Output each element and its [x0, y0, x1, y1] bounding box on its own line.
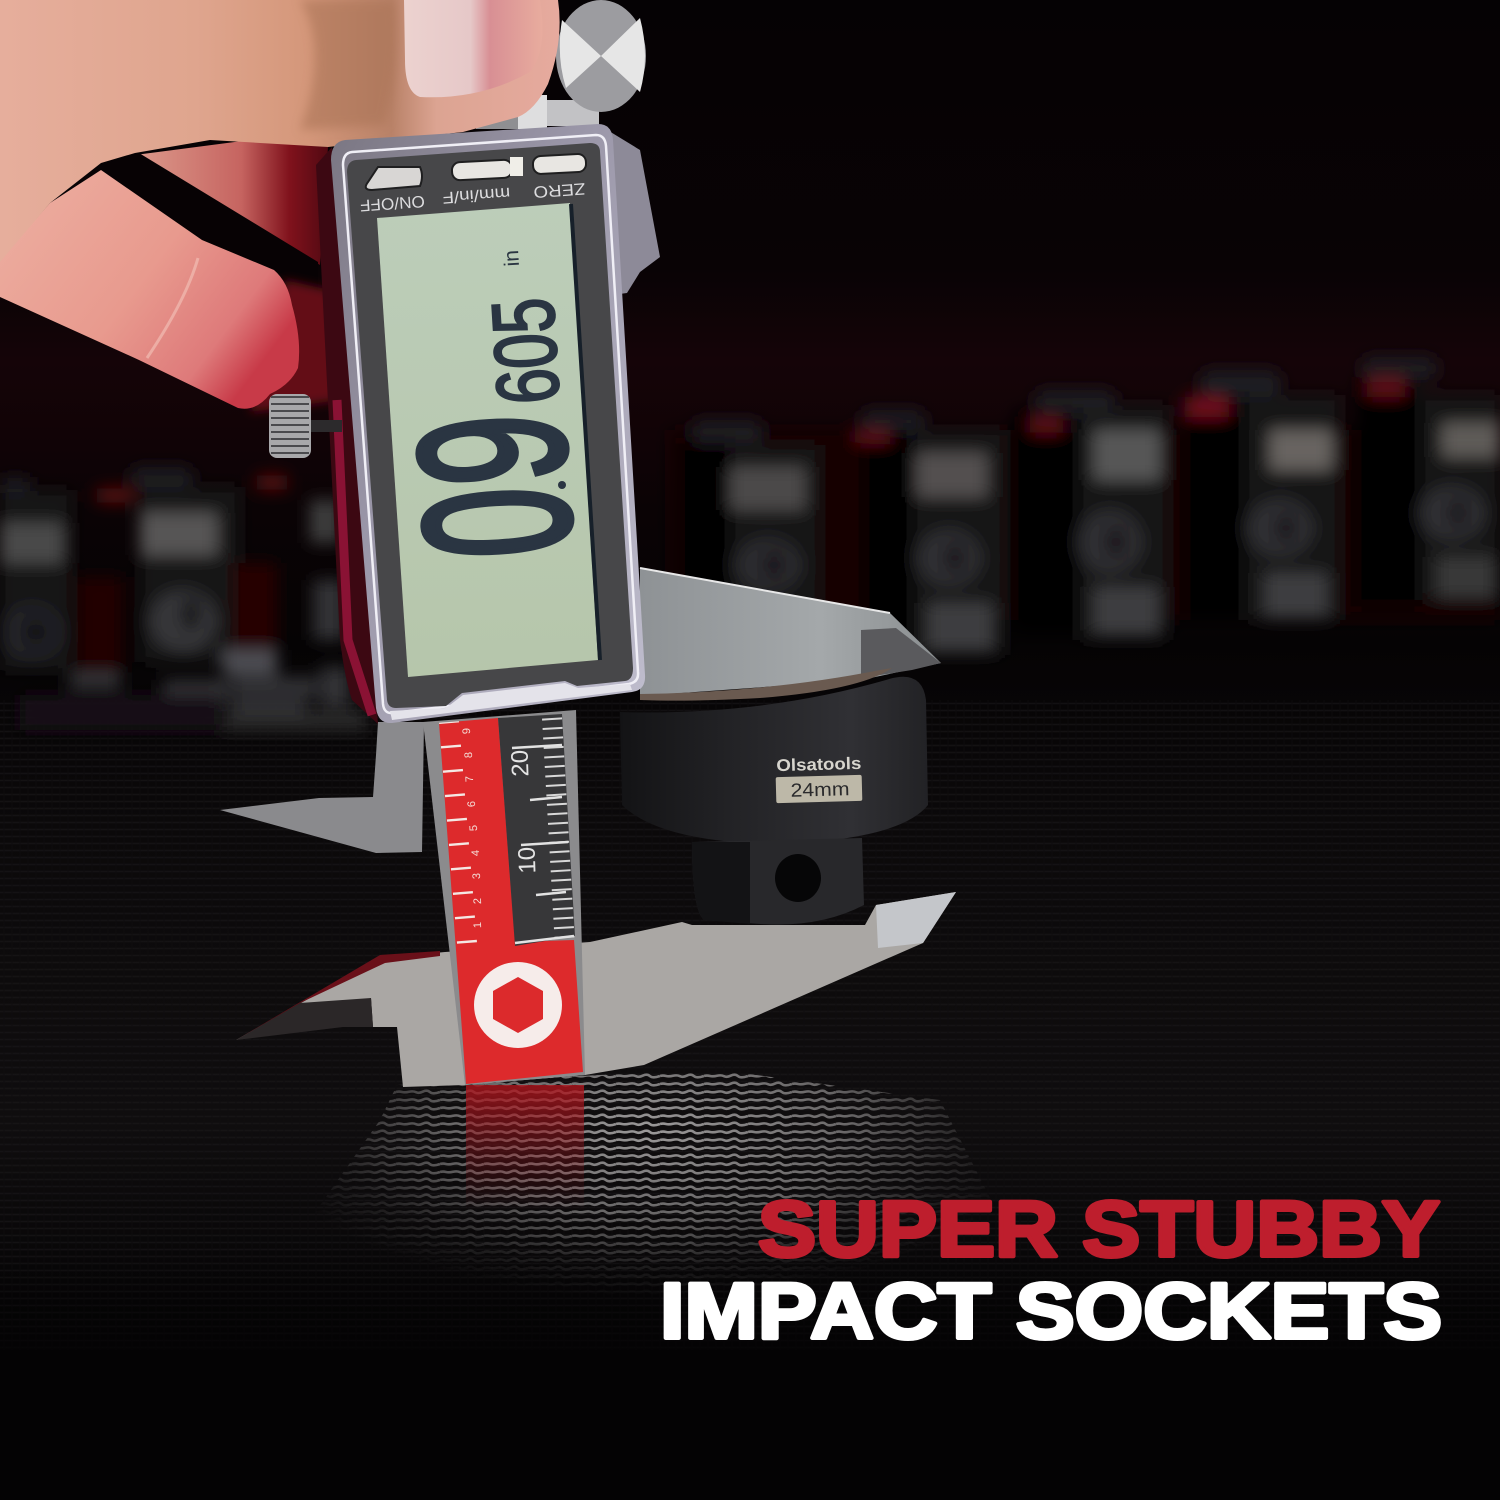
headline line 2: IMPACT SOCKETS — [660, 1266, 1442, 1355]
bright right jaw tip — [876, 892, 956, 948]
mode button — [452, 159, 512, 181]
dark scale — [498, 714, 575, 946]
zero button — [533, 154, 586, 174]
square drive — [692, 838, 864, 925]
blurred rail bars — [20, 667, 367, 730]
silver rim — [331, 124, 645, 723]
upper right jaw — [640, 568, 941, 696]
metric major ticks — [512, 745, 574, 943]
red reflection of scale on floor — [466, 1085, 584, 1210]
inch numerals: 8 — [463, 752, 475, 758]
metric numerals: 20 — [507, 749, 534, 777]
thumb nail — [404, 0, 542, 97]
retaining pin hole — [775, 854, 821, 902]
inch numerals: 3 — [471, 873, 483, 879]
LCD inner shadow line — [571, 204, 600, 660]
small reading digits: 605 — [475, 295, 578, 407]
digital display housing — [331, 124, 645, 723]
forefinger — [0, 170, 299, 409]
button labels — [359, 179, 586, 214]
centre socket — [70, 467, 240, 688]
dark faceplate — [347, 143, 633, 708]
socket one — [680, 420, 820, 630]
bottom thumbscrew — [269, 394, 342, 458]
lower lip highlight — [390, 683, 632, 720]
blurred socket row, right — [670, 357, 1500, 655]
thumb — [0, 0, 560, 262]
second finger behind — [135, 140, 328, 265]
maroon side of the display housing — [316, 147, 378, 724]
floor light reflection — [326, 1073, 985, 1284]
caliper beam — [423, 710, 585, 1085]
socket four — [1185, 370, 1340, 620]
on/off button — [366, 167, 422, 190]
size plate: 24mm — [790, 779, 850, 802]
gap between the fingers — [101, 153, 318, 290]
dark inner jaw tip — [236, 998, 373, 1040]
lower jaw — [236, 892, 956, 1087]
focused impact socket — [620, 668, 928, 925]
lower fade to black — [0, 1250, 1500, 1370]
decimal point — [558, 481, 566, 489]
fabric floor texture — [0, 700, 1500, 1350]
metric numerals — [507, 749, 541, 874]
button labels: ZERO — [533, 179, 586, 201]
brand name: Olsatools — [776, 754, 862, 775]
red glow beside forefinger — [250, 280, 340, 412]
inch numerals: 6 — [466, 801, 478, 807]
blurred socket row, left — [0, 467, 367, 730]
socket body — [620, 677, 928, 844]
hex logo centre — [493, 977, 543, 1033]
centre clip — [510, 157, 523, 176]
socket rim — [640, 668, 892, 701]
button labels: mm/in/F — [442, 184, 511, 206]
metric numerals: 10 — [514, 846, 541, 874]
inch numerals: 2 — [472, 898, 484, 904]
bright rim highlight — [343, 135, 638, 713]
hand holding the caliper — [0, 0, 560, 412]
red backdrop band — [670, 430, 1500, 620]
hex logo ring — [474, 962, 562, 1048]
upper left jaw — [220, 722, 424, 853]
socket five — [1356, 357, 1500, 605]
unit label: in — [500, 249, 524, 267]
inch numerals: 4 — [470, 850, 482, 856]
thumb wheel — [476, 0, 646, 129]
socket two — [855, 410, 1005, 655]
headline — [660, 1184, 1442, 1355]
right socket — [223, 475, 345, 675]
inch ticks — [449, 722, 467, 943]
caliper side wing — [604, 128, 660, 295]
inch numerals: 9 — [461, 728, 473, 734]
inch numerals: 1 — [472, 922, 484, 928]
red-lit top edge — [236, 951, 440, 1040]
thumb knuckle wrinkles — [300, 0, 397, 130]
socket three — [1013, 390, 1168, 640]
wheel highlights — [560, 18, 645, 92]
beam steel — [423, 710, 585, 1085]
LCD panel — [377, 203, 598, 677]
inch numerals: 5 — [468, 825, 480, 831]
inch numerals: 7 — [464, 776, 476, 782]
finger crease — [147, 258, 198, 358]
red scale — [439, 718, 583, 1084]
headline line 1: SUPER STUBBY — [758, 1184, 1440, 1273]
left socket — [0, 478, 72, 670]
size plate — [776, 775, 862, 803]
metric minor ticks — [552, 718, 564, 938]
button labels: ON/OFF — [359, 192, 425, 214]
inch numerals — [461, 728, 484, 928]
main reading digit 0: 0 — [380, 481, 616, 564]
main reading digit 9: 9 — [375, 408, 611, 491]
